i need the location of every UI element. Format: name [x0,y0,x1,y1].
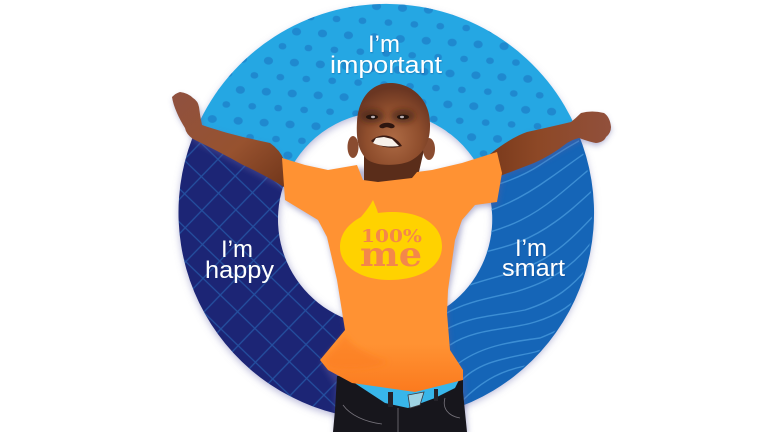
ring segment: I'm smart [447,138,594,405]
label: I'm smart [502,235,565,282]
face [360,109,415,148]
shirt text: 100%: 100% [361,226,422,247]
right arm and fist [490,112,611,176]
infographic: 100% me ring and boy [170,4,614,432]
ring segment: I'm happy [178,127,378,418]
ears [348,136,435,160]
label: I'm happy [205,236,274,284]
label: I'm important: important [330,52,442,79]
ring shadow [179,8,593,422]
orange t-shirt [282,152,502,392]
head [357,83,430,165]
boy shadow [173,95,612,432]
jeans [333,376,467,432]
label: I'm happy: I’m [221,236,253,263]
shirt folds [324,335,388,369]
label: I'm important [330,31,442,79]
label: I'm happy: happy [205,257,274,284]
neck [364,150,424,184]
boy [172,83,611,432]
ring segment: I'm important [197,4,578,178]
speech bubble [340,200,442,280]
label: I'm smart: I’m [515,235,547,262]
shirt text: me: me [360,235,422,275]
left arm and fist [172,92,290,192]
label: I'm smart: smart [502,255,565,282]
label: I'm important: I’m [368,31,400,58]
belt [350,378,460,408]
